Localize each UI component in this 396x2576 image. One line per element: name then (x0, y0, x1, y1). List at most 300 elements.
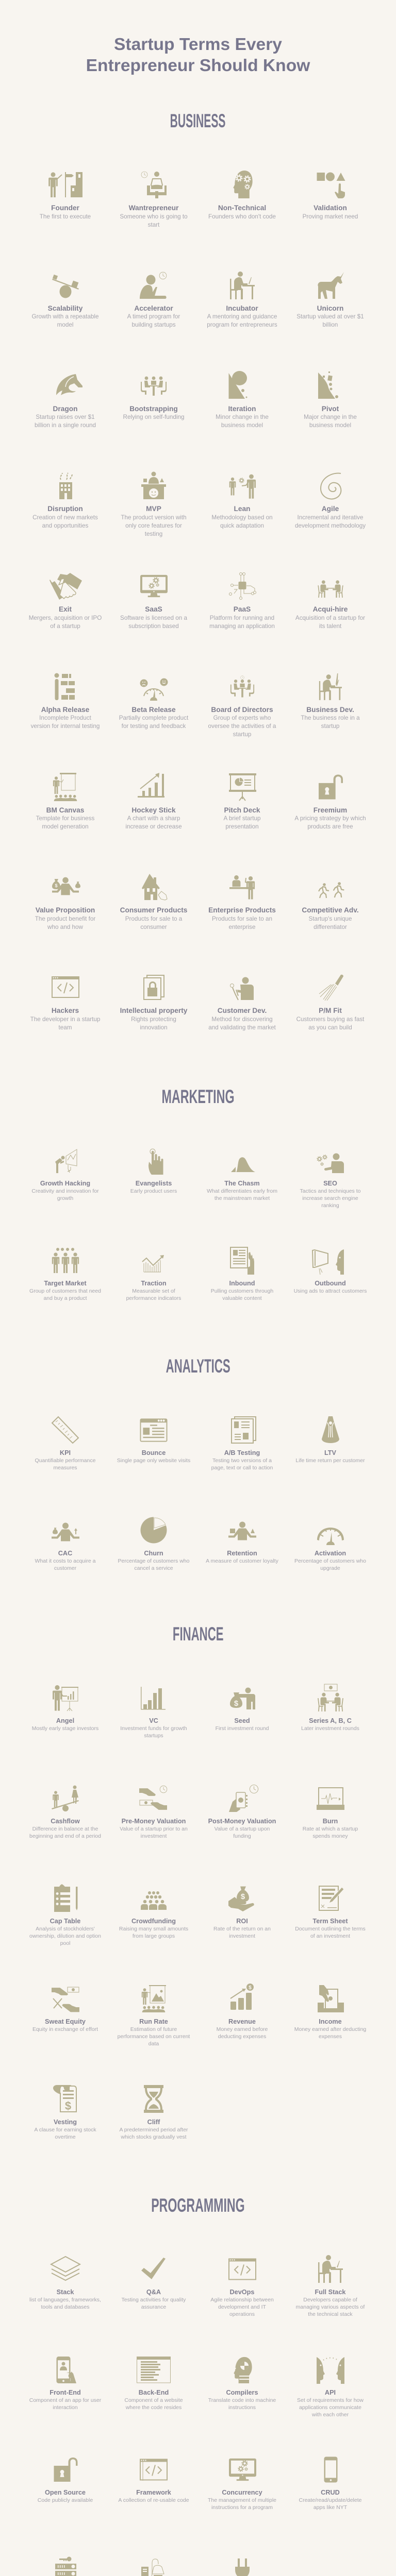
term: P/M Fit (286, 972, 374, 1039)
term title: Intellectual property (120, 1007, 187, 1014)
term description (104, 1825, 203, 1840)
term title: Traction (141, 1280, 167, 1287)
heading: business: BUSINESS (170, 110, 226, 131)
term description: and opportunities (42, 522, 88, 529)
term description: innovation (140, 1024, 168, 1031)
term title: Compilers (226, 2389, 258, 2396)
term title: Agile (322, 505, 339, 513)
term description: investment (229, 1933, 255, 1939)
term description (16, 2126, 114, 2141)
term description: The business role in a (301, 715, 360, 721)
term description (304, 414, 357, 429)
term description: Money earned before (217, 2026, 268, 2032)
icon: two people at table (309, 571, 351, 602)
icon: monitor with gears (222, 2454, 263, 2485)
term description: customer (54, 1565, 76, 1571)
term description: testing (145, 531, 162, 537)
term description: cancel a service (134, 1565, 173, 1571)
term description: Mergers, acquisition or IPO (29, 615, 102, 621)
term: Intellectual property (109, 972, 198, 1039)
icon: ruler (44, 1414, 86, 1445)
term: Full Stack (286, 2253, 374, 2320)
term description: start (148, 222, 159, 228)
term description: and buy a product (43, 1295, 87, 1301)
term: LTV (286, 1414, 374, 1481)
icon: founder (48, 172, 82, 197)
term description (16, 614, 114, 631)
panel: programming (0, 2188, 396, 2576)
term description: differentiator (314, 924, 347, 930)
term title: Full Stack (315, 2289, 345, 2296)
term description: Group of customers that need (29, 1288, 101, 1294)
term description (193, 1925, 291, 1940)
term: CRUD (286, 2454, 374, 2521)
icon: rising bars with arrow (133, 772, 174, 803)
term description (281, 1188, 380, 1209)
icon: code window (222, 2253, 263, 2284)
term: Founder (40, 172, 91, 220)
term description: Rate of the return on an (213, 1926, 271, 1932)
term description: enterprise (229, 924, 255, 930)
term title: Growth Hacking (40, 1180, 90, 1187)
term description: beginning and end of a period (29, 1833, 101, 1839)
term title: Back-End (139, 2389, 169, 2396)
term title: Founder (51, 204, 79, 212)
term title: Lean (234, 505, 250, 513)
term description (281, 2397, 380, 2418)
term description: consumer (140, 924, 167, 930)
term title: SaaS (145, 605, 162, 613)
icon: open lock (309, 772, 351, 803)
term description (104, 614, 203, 631)
term: Exit (21, 571, 109, 638)
term description (193, 1287, 291, 1302)
icon: man presenting chart (44, 1682, 86, 1713)
icon: server stack and key (44, 2554, 86, 2576)
icon: phone with hand (44, 2354, 86, 2385)
term description (281, 514, 380, 530)
term title: Post-Money Valuation (208, 1818, 276, 1825)
term: Operating System (198, 2554, 286, 2576)
icon: person at laptop (230, 272, 255, 299)
term description: Percentage of customers who (294, 1558, 366, 1564)
term: Lean (198, 470, 286, 537)
term title: Stack (57, 2289, 74, 2296)
term description: presentation (225, 823, 259, 830)
term description: of an investment (310, 1933, 350, 1939)
term description: page, text or call to action (211, 1465, 273, 1471)
term description: Methodology based on (211, 514, 273, 521)
heading: analytics: ANALYTICS (166, 1355, 230, 1377)
term description: investment (141, 1833, 167, 1839)
term description: The product version with (121, 514, 187, 521)
icon: man beside bricks (44, 671, 86, 702)
term description (193, 1015, 291, 1032)
term description: A brief startup (223, 815, 261, 822)
term: DevOps (198, 2253, 286, 2320)
term description: A measure of customer loyalty (206, 1558, 278, 1564)
term description: Relying on self-funding (123, 414, 184, 420)
term: Inbound (198, 1245, 286, 1312)
term title: DevOps (230, 2289, 254, 2296)
term description (193, 2497, 291, 2511)
icon: person and chart screen (44, 1145, 86, 1176)
icon: hand holding phone with clock (222, 1783, 263, 1814)
term: Revenue (198, 1983, 286, 2050)
term description: Incremental and iterative (297, 514, 363, 521)
term title: Acqui-hire (313, 605, 348, 613)
term description: which stocks gradually vest (121, 2134, 187, 2140)
term: Freemium (286, 772, 374, 839)
term description (296, 313, 364, 328)
icon: check mark (133, 2253, 174, 2284)
icon: hands with tools and bill (44, 1983, 86, 2014)
term description: Template for business (36, 815, 94, 822)
term description: The product benefit for (35, 916, 95, 922)
term description: The first to execute (40, 213, 91, 220)
icon: handshake (44, 571, 86, 602)
term description: Raising many small amounts (119, 1926, 188, 1932)
term description: growth (57, 1195, 73, 1201)
term description: A mentoring and guidance (207, 313, 277, 320)
term description: Value of a startup prior to an (120, 1826, 188, 1832)
title: Startup Terms Every (114, 35, 282, 54)
term title: ROI (236, 1918, 248, 1925)
term description: billion in a single round (35, 422, 96, 429)
term description: First investment round (216, 1725, 269, 1732)
term description: model (57, 321, 73, 328)
icon: crowd (133, 1883, 174, 1913)
term description: as you can build (308, 1024, 352, 1031)
term description: Create/read/update/delete (299, 2497, 362, 2503)
term title: Outbound (315, 1280, 346, 1287)
icon: gauge (309, 1515, 351, 1546)
term title: PaaS (234, 605, 251, 613)
term description: program for entrepreneurs (207, 321, 277, 328)
term: SEO (286, 1145, 374, 1212)
term: CAC (21, 1515, 109, 1582)
term title: CAC (58, 1550, 72, 1557)
term title: Cliff (147, 2119, 160, 2126)
icon: bar chart (133, 1682, 174, 1713)
term: Compilers (198, 2354, 286, 2421)
term description: Customers buying as fast (296, 1016, 364, 1023)
icon: circuit (222, 571, 263, 602)
term title: Pivot (322, 405, 339, 412)
term: Hackers (21, 972, 109, 1039)
term: Seed (198, 1682, 286, 1749)
term description (104, 1287, 203, 1302)
icon: shapes and pointing hand (317, 172, 345, 198)
term description: increase or decrease (125, 823, 182, 830)
term description: A timed program for (127, 313, 180, 320)
term: Traction (109, 1245, 198, 1312)
heading: marketing: MARKETING (161, 1086, 235, 1107)
icon: hand holding money bag (222, 1883, 263, 1913)
term: Pivot (304, 371, 357, 429)
term title: LTV (324, 1449, 336, 1456)
icon: person at laptop (309, 2253, 351, 2284)
term description: Founders who don't code (208, 213, 276, 220)
icon: person balancing money: $ (55, 883, 57, 888)
term description: assurance (141, 2304, 166, 2310)
term description (16, 815, 114, 831)
term description: ownership, dilution and option (29, 1933, 101, 1939)
term description: business model (221, 422, 263, 429)
term description: products are free (307, 823, 353, 830)
term: Angel (21, 1682, 109, 1749)
term description (281, 2497, 380, 2511)
term description: spends money (312, 1833, 348, 1839)
term description: Startup's unique (308, 916, 352, 922)
term description: building startups (131, 321, 176, 328)
term description: Testing activities for quality (122, 2297, 186, 2303)
term description: instructions (228, 2404, 256, 2411)
term description: Rights protecting (131, 1016, 176, 1023)
icon: rocks falling (318, 371, 338, 399)
icon: person balancing money (44, 872, 86, 903)
term description (127, 313, 180, 328)
term title: Income (319, 2018, 342, 2025)
term title: Activation (315, 1550, 346, 1557)
term title: Open Source (45, 2489, 86, 2496)
icon: person at desk with face (141, 472, 166, 499)
term title: Unicorn (317, 304, 343, 312)
icon: unicorn (318, 272, 344, 299)
icon: hand holding money bag: $ (240, 1892, 245, 1901)
term: Concurrency (198, 2454, 286, 2521)
term: Open Source (21, 2454, 109, 2521)
icon: gauge with faces (133, 671, 174, 702)
term: Churn (109, 1515, 198, 1582)
term description (104, 2026, 203, 2047)
icon: presentation board (222, 772, 263, 803)
term description: development methodology (295, 522, 366, 529)
icon: person in spotlight (309, 1414, 351, 1445)
term description (16, 1188, 114, 1202)
term title: Scalability (48, 304, 82, 312)
term description: Software is licensed on a (120, 615, 187, 621)
term title: Freemium (314, 806, 347, 814)
term description: model generation (42, 823, 89, 830)
term title: Pre-Money Valuation (122, 1818, 186, 1825)
term description (281, 614, 380, 631)
term description (104, 1725, 203, 1739)
term description: data (148, 2041, 159, 2047)
term description (193, 1825, 291, 1840)
term description: subscription based (128, 623, 179, 630)
term description: Set of requirements for how (297, 2397, 364, 2403)
term title: Series A, B, C (309, 1717, 352, 1724)
term: Cache (109, 2554, 198, 2576)
term description: A chart with a sharp (127, 815, 180, 822)
icon: hand depositing bill (309, 1983, 351, 2014)
icon: head with pie (222, 2354, 263, 2385)
term description: Proving market need (303, 213, 358, 220)
term: Agile (286, 470, 374, 537)
term title: Sweat Equity (45, 2018, 86, 2025)
icon: monitor with gears (133, 571, 174, 602)
term title: Disruption (47, 505, 83, 513)
term description (281, 915, 380, 931)
term description: the technical stack (308, 2311, 353, 2317)
term: KPI (21, 1414, 109, 1481)
term description: tools and databases (41, 2304, 90, 2310)
icon: hands with clock and bill (133, 1783, 174, 1814)
term description: Growth with a repeatable (32, 313, 98, 320)
term title: P/M Fit (319, 1007, 342, 1014)
term description: The developer in a startup (30, 1016, 100, 1023)
term: Vesting (21, 2083, 109, 2150)
term title: Wantrepreneur (129, 204, 178, 212)
term description: business model (309, 422, 351, 429)
term description: Mostly early stage investors (32, 1725, 98, 1732)
term description (193, 1188, 291, 1202)
term description: Developers capable of (303, 2297, 357, 2303)
term description (281, 1015, 380, 1032)
term title: Alpha Release (41, 706, 89, 714)
term title: Burn (323, 1818, 338, 1825)
term description: Incomplete Product (39, 715, 91, 721)
icon: person with money bag: $ (234, 1699, 238, 1708)
term title: Business Dev. (306, 706, 354, 714)
term title: Bootstrapping (129, 405, 178, 412)
icon: computer linked to head (133, 2554, 174, 2576)
term description: A collection of re-usable code (118, 2497, 189, 2503)
term description: Agile relationship between (210, 2297, 274, 2303)
icon: contract with pen (309, 1883, 351, 1913)
term: Sweat Equity (21, 1983, 109, 2050)
term: Scalability (32, 274, 98, 328)
term description (16, 2397, 114, 2411)
term: Competitive Adv. (286, 872, 374, 939)
term description: list of languages, frameworks, (29, 2297, 101, 2303)
term title: Beta Release (131, 706, 176, 714)
term description: Early product users (130, 1188, 177, 1194)
term description: Estimation of future (130, 2026, 177, 2032)
term description (281, 2026, 380, 2040)
term description: Method for discovering (211, 1016, 273, 1023)
icon: seesaw on ball (52, 274, 79, 298)
term: Burn (286, 1783, 374, 1850)
term description (120, 213, 188, 228)
term title: Framework (136, 2489, 171, 2496)
icon: code window (44, 972, 86, 1003)
term description: Value of a startup upon (214, 1826, 270, 1832)
term description: Code publicly available (38, 2497, 93, 2503)
term description: performance indicators (126, 1295, 181, 1301)
term: Cliff (109, 2083, 198, 2150)
term: Bootstrapping (123, 376, 184, 420)
term title: Dragon (53, 405, 77, 412)
term title: Non-Technical (218, 204, 266, 212)
term description: overtime (55, 2134, 76, 2140)
term description (281, 1557, 380, 1572)
term: Bounce (109, 1414, 198, 1481)
term description: deducting expenses (218, 2033, 266, 2040)
term description: apps like NYT (314, 2504, 347, 2511)
term description (35, 414, 96, 429)
term title: API (325, 2389, 336, 2396)
term description: Someone who is going to (120, 213, 188, 220)
term description: startups (144, 1733, 163, 1739)
term title: Crowdfunding (131, 1918, 176, 1925)
icon: dragon head (56, 374, 82, 395)
icon: person waiting with clock (141, 171, 167, 198)
term description: Rate at which a startup (303, 1826, 358, 1832)
term description (207, 313, 277, 328)
term: Acqui-hire (286, 571, 374, 638)
panel: finance (0, 1616, 396, 2152)
icon: screen with pulse (309, 1783, 351, 1814)
term: Back-End (109, 2354, 198, 2421)
term: Evangelists (109, 1145, 198, 1212)
term: Retention (198, 1515, 286, 1582)
term title: Run Rate (139, 2018, 168, 2025)
term title: Pitch Deck (224, 806, 260, 814)
term description: valuable content (222, 1295, 262, 1301)
term: Non-Technical (208, 171, 276, 220)
term title: KPI (60, 1449, 71, 1456)
term title: Bounce (142, 1449, 166, 1456)
term description (16, 1457, 114, 1471)
term description: Life time return per customer (295, 1458, 365, 1464)
icon: papers with lock (133, 972, 174, 1003)
term description (281, 714, 380, 731)
term title: Cashflow (51, 1818, 80, 1825)
icon: person with money bag (222, 1682, 263, 1713)
term description: who and how (47, 924, 83, 930)
term: Database (21, 2554, 109, 2576)
term description (193, 714, 291, 739)
term title: VC (149, 1717, 158, 1724)
term description: ranking (321, 1202, 339, 1209)
icon: bars with arrow and coin: $ (249, 1985, 252, 1991)
term description: Group of experts who (213, 715, 271, 721)
term description (281, 2296, 380, 2318)
icon: chart with arrow (133, 1245, 174, 1276)
icon: exploding building (59, 472, 73, 499)
term description: startup (233, 731, 251, 738)
icon: two page versions (222, 1414, 263, 1445)
panel: business (29, 110, 366, 1031)
term: Incubator (207, 272, 277, 328)
term: Q&A (109, 2253, 198, 2320)
term description (281, 1825, 380, 1840)
term description: Tactics and techniques to (300, 1188, 360, 1194)
term: Business Dev. (286, 671, 374, 738)
term: Activation (286, 1515, 374, 1582)
term description: its talent (319, 623, 341, 630)
term description (104, 2126, 203, 2141)
icon: hourglass (133, 2083, 174, 2114)
term title: Incubator (226, 304, 258, 312)
term description (193, 2026, 291, 2040)
term description: Acquisition of a startup for (295, 615, 365, 621)
term: BM Canvas (21, 772, 109, 839)
term description: interaction (53, 2404, 78, 2411)
term description: A predetermined period after (119, 2127, 188, 2133)
term title: CRUD (321, 2489, 340, 2496)
term description (104, 1015, 203, 1032)
term: Dragon (35, 374, 96, 429)
term description: A pricing strategy by which (294, 815, 366, 822)
term title: Vesting (54, 2119, 77, 2126)
term: A/B Testing (198, 1414, 286, 1481)
term title: A/B Testing (224, 1449, 260, 1456)
term description: A clause for earning stock (34, 2127, 96, 2133)
term: Pitch Deck (198, 772, 286, 839)
